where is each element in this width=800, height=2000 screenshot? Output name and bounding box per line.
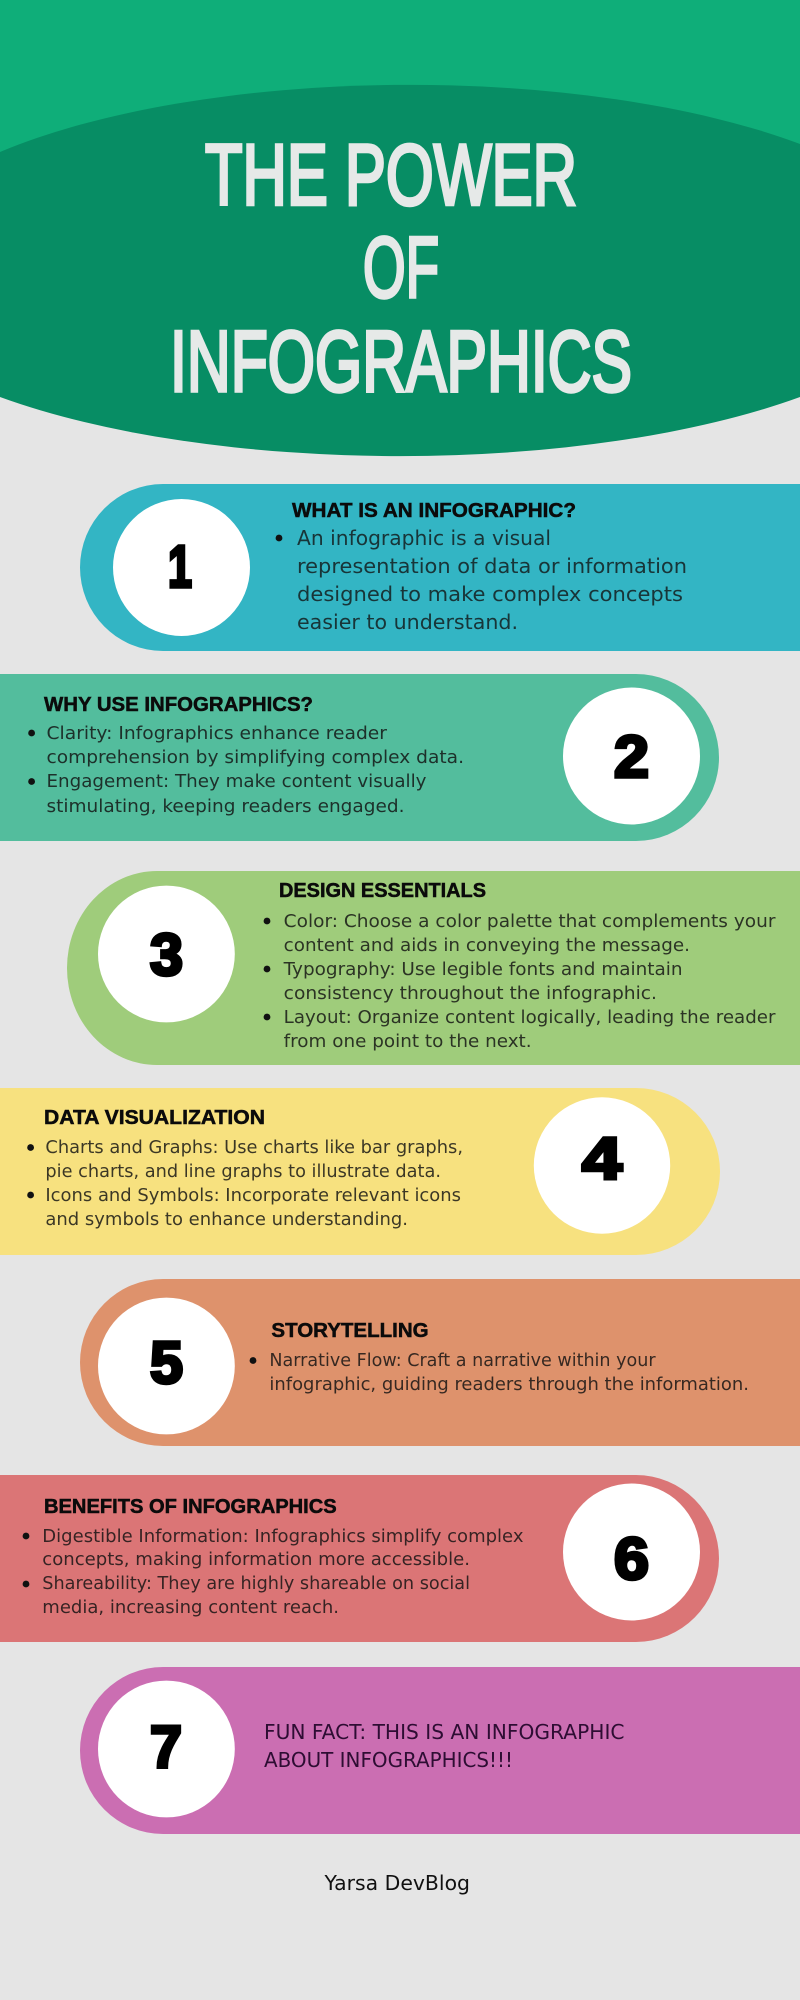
body text 4: Charts and Graphs: Use charts like bar graphs, [45, 1137, 463, 1158]
number badge 4: 4 [582, 1126, 622, 1192]
panel 7: fun fact [80, 1667, 800, 1834]
number badge 7: 7 [150, 1714, 182, 1780]
number badge 3 [98, 886, 235, 1022]
body text 5: Narrative Flow: Craft a narrative within your [269, 1350, 656, 1371]
number badge 6 [563, 1484, 700, 1620]
body text 6: media, increasing content reach. [42, 1597, 339, 1618]
fun fact text [264, 1720, 624, 1772]
body text 1 [276, 526, 687, 634]
body text 2: Engagement: They make content visually [46, 771, 427, 792]
footer credit: Yarsa DevBlog [323, 1871, 470, 1895]
body text 2 [28, 723, 464, 817]
number badge 5 [98, 1298, 235, 1434]
fun fact text: FUN FACT: THIS IS AN INFOGRAPHIC [264, 1720, 624, 1744]
body text 3: consistency throughout the infographic. [284, 983, 657, 1004]
body text 6: concepts, making information more accessible. [42, 1549, 470, 1570]
number badge 2 [563, 688, 700, 824]
panel 2: why use infographics [0, 674, 719, 841]
fun fact text: ABOUT INFOGRAPHICS!!! [264, 1748, 513, 1772]
number badge 1: 1 [168, 534, 192, 600]
number badge 6: 6 [614, 1526, 649, 1592]
heading 5: STORYTELLING [271, 1320, 429, 1342]
number badge 1 [113, 499, 250, 636]
heading 2: WHY USE INFOGRAPHICS? [44, 694, 313, 716]
heading 4: DATA VISUALIZATION [44, 1107, 265, 1129]
body text 3 [264, 911, 776, 1052]
body text 1: An infographic is a visual [297, 526, 551, 550]
body text 1: representation of data or information [297, 554, 687, 578]
panel 4: data visualization [0, 1088, 720, 1255]
body text 4: Icons and Symbols: Incorporate relevant icons [45, 1185, 461, 1206]
body text 4 [27, 1137, 463, 1230]
title: OF [363, 220, 439, 316]
body text 5 [250, 1350, 749, 1395]
body text 2: comprehension by simplifying complex data. [46, 747, 464, 768]
panel 5: storytelling [80, 1279, 800, 1446]
panel 3: design essentials [67, 871, 800, 1065]
body text 1: designed to make complex concepts [297, 582, 683, 606]
heading 6: BENEFITS OF INFOGRAPHICS [44, 1496, 337, 1518]
body text 6: Shareability: They are highly shareable on social [42, 1573, 470, 1594]
title: THE POWER [205, 128, 577, 224]
body text 6 [23, 1526, 524, 1618]
body text 3: Color: Choose a color palette that complements your [284, 911, 776, 932]
body text 3: from one point to the next. [284, 1031, 532, 1052]
body text 2: Clarity: Infographics enhance reader [46, 723, 388, 744]
body text 3: content and aids in conveying the message. [284, 935, 690, 956]
body text 5: infographic, guiding readers through the information. [269, 1374, 749, 1395]
number badge 2: 2 [614, 724, 649, 790]
body text 1: easier to understand. [297, 610, 518, 634]
heading 1: WHAT IS AN INFOGRAPHIC? [292, 500, 576, 522]
body text 3: Layout: Organize content logically, leading the reader [284, 1007, 776, 1028]
header banner [0, 0, 800, 456]
body text 4: and symbols to enhance understanding. [45, 1209, 408, 1230]
body text 2: stimulating, keeping readers engaged. [46, 796, 404, 817]
number badge 5: 5 [150, 1330, 183, 1396]
number badge 4 [534, 1097, 670, 1234]
body text 4: pie charts, and line graphs to illustrate data. [45, 1161, 441, 1182]
heading 3: DESIGN ESSENTIALS [279, 880, 486, 902]
panel 1: what is an infographic [80, 484, 800, 651]
number badge 7 [98, 1681, 235, 1817]
body text 6: Digestible Information: Infographics simplify complex [42, 1526, 524, 1547]
body text 3: Typography: Use legible fonts and maintain [283, 959, 683, 980]
panel 6: benefits of infographics [0, 1475, 719, 1642]
title [170, 128, 632, 410]
number badge 3: 3 [150, 922, 183, 988]
